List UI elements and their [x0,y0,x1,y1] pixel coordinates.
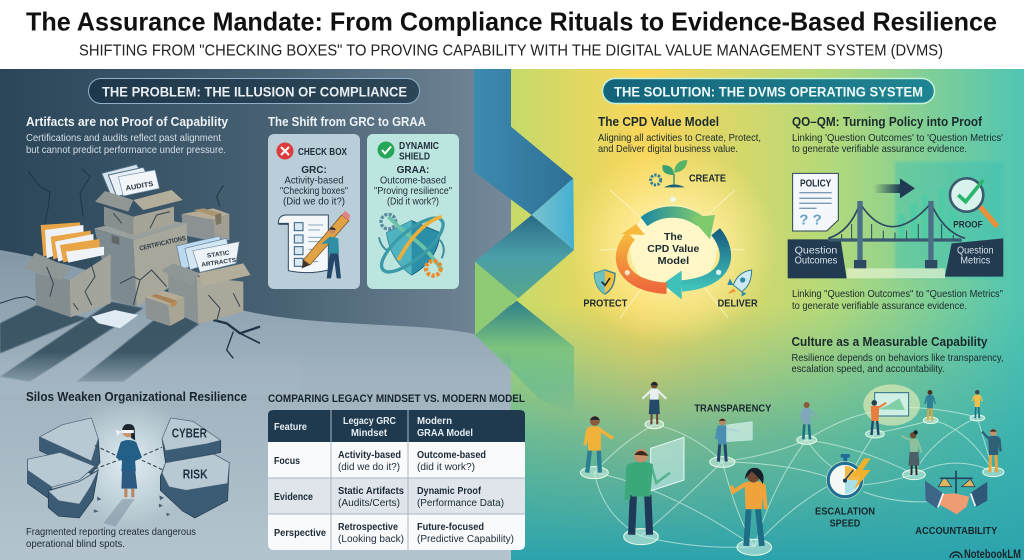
land: question metrics: Metrics [960,256,990,267]
row: perspective: (Looking back) [338,534,404,545]
card: GRAA dynamic shield: GRAA: [397,165,429,176]
text block: CPD value model: The CPD Value Model [598,114,719,129]
land: question outcomes: Outcomes [795,256,837,267]
row: evidence: Dynamic Proof [417,486,482,497]
label: escalation speed: SPEED [830,519,861,530]
table header: Feature [274,422,307,433]
box: back right [182,208,229,242]
row: evidence: Static Artifacts [338,486,404,497]
pill: the problem heading: THE PROBLEM: THE ILLUSION OF COMPLIANCE [102,84,407,100]
comparison table [268,410,525,550]
card: GRC check box: CHECK BOX [298,146,347,158]
card: GRC check box: "Checking boxes" [280,186,348,197]
heading: comparison table: COMPARING LEGACY MINDSET VS. MODERN MODEL [268,393,525,405]
bridge [828,201,965,268]
pill: the solution heading [602,78,934,104]
text block: CPD value model: Aligning all activities to Create, Protect, [598,132,761,144]
text block: artifacts: Certifications and audits reflect past alignment [26,132,221,144]
text block: QO-QM repeated caption: Linking "Question Outcomes" to "Question Metrics" [792,288,1003,300]
row: perspective: Perspective [274,528,326,539]
screen: transparency panel [727,422,752,442]
person: man in grey-blue [801,402,817,439]
centre label: CPD Value [647,244,700,255]
box: static artifacts: ARTRACTS [201,258,237,269]
text block: CPD value model [598,114,761,155]
land: question metrics [945,238,1003,277]
centre label: Model [657,256,689,267]
card: GRC check box: (Did we do it?) [283,196,345,208]
text block: fragmented reporting [26,526,196,550]
text block: QO-QM repeated caption [792,288,1003,312]
box: certifications [94,217,188,307]
diagram: QO-QM bridge: PROOF [953,220,983,230]
label: accountability: ACCOUNTABILITY [915,526,997,537]
card: GRAA dynamic shield: "Proving resilience" [374,186,452,197]
person: woman in green with skirt [901,430,922,475]
person: large man in green [627,449,670,535]
text block: artifacts [26,114,229,156]
box: certifications: CERTIFICATIONS [139,235,187,253]
icon: create plant and gear [651,160,687,187]
table header: Legacy GRC [343,416,396,427]
icon: policy document [793,173,838,231]
icon: policy document: ? ? [799,212,822,229]
label: escalation speed: ESCALATION [815,507,875,518]
text block: QO-QM: Linking 'Question Outcomes' to 'Question Metrics' [792,132,1003,144]
person: man with yellow trousers [982,429,1001,472]
person: man in orange at screen [871,400,886,435]
text block: QO-QM: QO–QM: Turning Policy into Proof [792,114,983,129]
text block: fragmented reporting: operational blind spots. [26,538,125,550]
box: static artifacts: STATIC [207,250,231,260]
arrow: protect to create [621,224,667,288]
arrow: create to deliver [644,212,715,239]
row: evidence: (Audits/Certs) [338,498,400,509]
row: perspective: Future-focused [417,522,484,533]
diagram: CPD value cycle [583,160,758,309]
ribbon: central chevron divider [474,69,574,413]
table header: GRAA Model [417,428,473,439]
card: GRAA dynamic shield: DYNAMIC [399,140,439,152]
row: focus: (did we do it?) [338,462,400,473]
arrow: policy to proof [873,178,915,198]
row: focus [274,450,486,473]
subtitle: SHIFTING FROM "CHECKING BOXES" TO PROVING CAPABILITY WITH THE DIGITAL VALUE MANAGEMENT SYSTEM (DVMS) [79,42,943,60]
card: GRC check box [268,134,360,289]
person: woman in orange [731,468,766,546]
arrow: deliver to protect [663,232,725,299]
text block: culture: escalation speed, and accountability. [792,363,944,375]
text block: QO-QM: to generate verifiable assurance evidence. [792,143,967,155]
land: question outcomes: Question [795,245,837,256]
illustration: checklist and pencil [278,211,350,278]
person: woman in white top [642,382,666,424]
label: escalation speed [815,507,875,530]
icon: deliver rocket [727,270,752,297]
person: transparency presenter [716,418,740,462]
row: evidence: (Performance Data) [417,498,504,509]
land: question metrics: Question [957,245,994,256]
icon: stopwatch with lightning [826,454,871,499]
diagram: CPD value cycle: PROTECT [583,298,628,309]
person: yellow shirt [585,416,613,473]
row: evidence: Evidence [274,492,313,503]
table header: Modern [417,416,452,427]
table header: Mindset [351,428,388,439]
text block: fragmented reporting: Fragmented reporting creates dangerous [26,526,196,538]
screen: chart display [863,384,920,426]
heading: silos: Silos Weaken Organizational Resilience [26,389,247,404]
panel: the problem background [0,69,511,560]
card: GRAA dynamic shield: SHIELD [399,150,430,162]
icon: scales and handshake [925,471,987,514]
diagram: CPD value cycle: DELIVER [718,298,758,309]
row: focus: Focus [274,456,300,467]
centre label [647,232,700,267]
pill: the solution heading: THE SOLUTION: THE DVMS OPERATING SYSTEM [614,84,923,100]
box: audits [95,164,183,235]
diagram: CPD value cycle: CREATE [689,173,726,184]
card: GRC check box: Activity-based [284,176,344,186]
icon: red cross [276,142,294,160]
text block: CPD value model: and Deliver digital business value. [598,143,738,155]
node platforms [580,415,1004,555]
box: static artifacts [161,236,251,324]
heading: shift from GRC to GRAA: The Shift from GRC to GRAA [268,114,427,129]
text block: culture [792,334,1004,375]
text block: artifacts: Artifacts are not Proof of Capability [26,114,229,129]
icon: policy document: POLICY [800,179,832,190]
icon: magnifier with check [950,178,996,225]
centre label: The [664,232,683,243]
person: blindfolded [116,424,142,497]
person: teal with yellow trousers [925,390,935,421]
illustration: broken silos and blindfolded person: RISK [183,466,208,481]
illustration: cracked compliance boxes [0,164,260,358]
row: focus: Activity-based [338,450,401,461]
glass panel [651,437,684,491]
network: culture people and links [580,382,1004,555]
row: perspective: Retrospective [338,522,398,533]
diagram: QO-QM bridge [788,162,1003,278]
text block: QO-QM [792,114,1003,155]
title: The Assurance Mandate: From Compliance Rituals to Evidence-Based Resilience [26,6,997,36]
card: GRAA dynamic shield: Outcome-based [380,176,446,186]
illustration: broken silos and blindfolded person [28,397,229,528]
panel: the solution background [511,69,1024,560]
box: folders [25,222,111,317]
land: question outcomes [788,239,847,278]
text block: culture: Resilience depends on behaviors like transparency, [792,352,1004,364]
network links [594,407,993,547]
icon: protect shield [594,270,615,294]
label: transparency: TRANSPARENCY [694,404,771,415]
row: perspective: (Predictive Capability) [417,534,514,545]
text block: QO-QM repeated caption: to generate verifiable assurance evidence. [792,300,967,312]
text block: culture: Culture as a Measurable Capability [792,334,988,349]
icon: green check [378,142,394,158]
illustration: broken silos and blindfolded person: CYBER [172,426,207,441]
illustration: shield with orbit and gears [374,210,451,280]
row: evidence [274,486,504,509]
card: GRAA dynamic shield [367,134,459,289]
card: GRAA dynamic shield: (Did it work?) [387,196,439,208]
table header [274,416,473,439]
row: focus: Outcome-based [417,450,486,461]
row: focus: (did it work?) [417,462,475,473]
loose paper [92,310,138,328]
pill: the problem heading [88,78,420,104]
box: audits: AUDITS [125,181,154,193]
card: GRC check box: GRC: [301,165,327,176]
box: small taped [145,291,184,326]
row: perspective [274,522,514,545]
person: yellow with teal trousers [972,390,982,418]
text block: artifacts: but cannot predict performance under pressure. [26,144,226,156]
